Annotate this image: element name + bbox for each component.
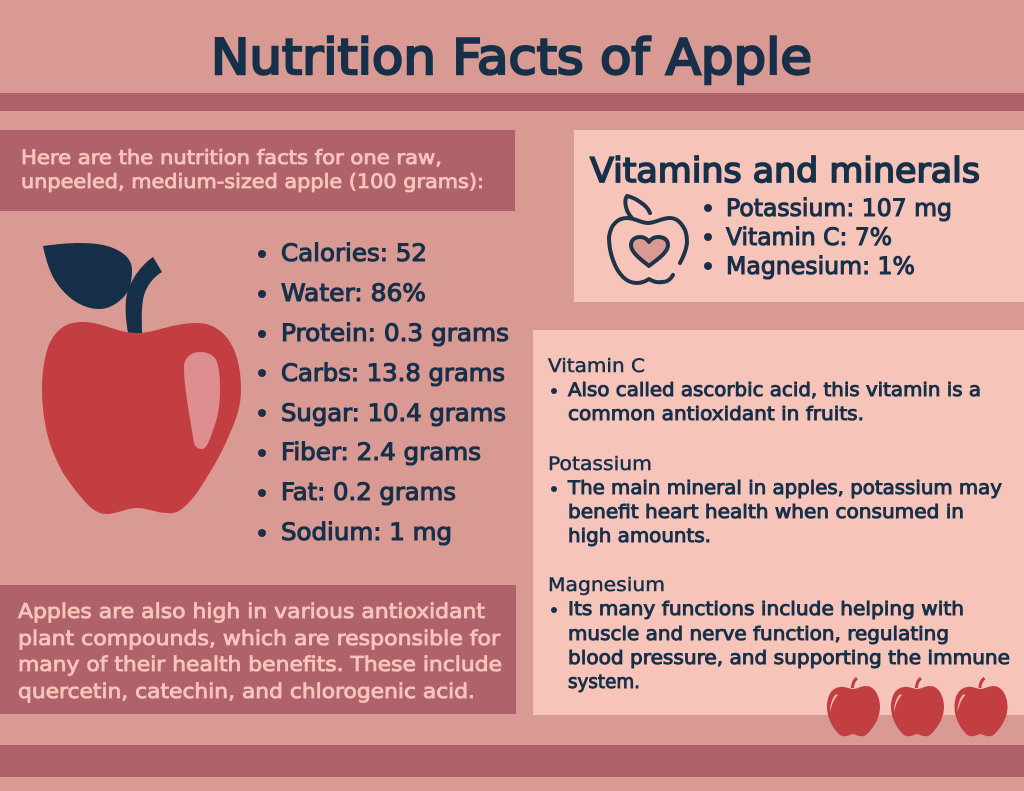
nutrient list: Water: 86% — [281, 279, 426, 307]
text: vitamin C — [548, 355, 981, 425]
text: potassium: high amounts. — [568, 525, 711, 547]
nutrient list: Sugar: 10.4 grams — [281, 399, 506, 427]
panel: intro — [0, 130, 515, 211]
panel: details — [533, 330, 1024, 715]
panel: vitamins and minerals — [574, 130, 1024, 302]
text: magnesium: muscle and nerve function, regulating — [568, 623, 949, 645]
panel: antioxidants — [0, 585, 516, 714]
nutrient list: Fiber: 2.4 grams — [281, 438, 481, 466]
text: potassium: benefit heart health when consumed in — [568, 501, 964, 523]
text: vitamin C: Vitamin C — [548, 355, 645, 377]
icon: apple with heart — [609, 196, 687, 283]
nutrient list: Protein: 0.3 grams — [281, 319, 509, 347]
panel: antioxidants: Apples are also high in various antioxidant — [18, 599, 485, 623]
nutrient list: Carbs: 13.8 grams — [281, 359, 505, 387]
text: magnesium — [548, 574, 1010, 693]
panel: intro: Here are the nutrition facts for one raw, — [21, 146, 442, 169]
icon: apple 2 — [891, 677, 944, 736]
text: magnesium: blood pressure, and supporting the immune — [568, 647, 1010, 669]
top band — [0, 93, 1024, 111]
icon: apple 1 — [827, 677, 880, 736]
nutrient list: Fat: 0.2 grams — [281, 478, 456, 506]
text: potassium — [548, 453, 1002, 547]
panel: antioxidants: many of their health benefits. These include — [18, 652, 502, 676]
panel: intro: unpeeled, medium-sized apple (100 grams): — [21, 170, 484, 193]
title: Nutrition Facts of Apple — [211, 29, 812, 86]
text: vitamin C: common antioxidant in fruits. — [568, 403, 864, 425]
nutrient list: Sodium: 1 mg — [281, 518, 452, 546]
icon: apple 3 — [954, 677, 1008, 736]
bottom band — [0, 745, 1024, 777]
nutrient list: Calories: 52 — [281, 239, 427, 267]
vitamin list: Magnesium: 1% — [726, 252, 915, 280]
text: magnesium: Magnesium — [548, 574, 665, 596]
illustration: apple — [42, 243, 241, 514]
heading: vitamins and minerals: Vitamins and minerals — [590, 151, 980, 191]
text: magnesium: system. — [568, 671, 640, 693]
icon: three apples — [827, 677, 1008, 736]
panel: antioxidants: quercetin, catechin, and chlorogenic acid. — [18, 679, 475, 703]
text: magnesium: Its many functions include helping with — [568, 598, 964, 620]
text: potassium: Potassium — [548, 453, 652, 475]
panel: antioxidants: plant compounds, which are responsible for — [18, 626, 501, 650]
vitamin list: Vitamin C: 7% — [726, 223, 892, 251]
vitamin list — [704, 194, 952, 280]
text: vitamin C: Also called ascorbic acid, this vitamin is a — [568, 379, 981, 401]
vitamin list: Potassium: 107 mg — [726, 194, 952, 222]
text: potassium: The main mineral in apples, potassium may — [567, 477, 1002, 499]
nutrient list — [258, 239, 509, 546]
